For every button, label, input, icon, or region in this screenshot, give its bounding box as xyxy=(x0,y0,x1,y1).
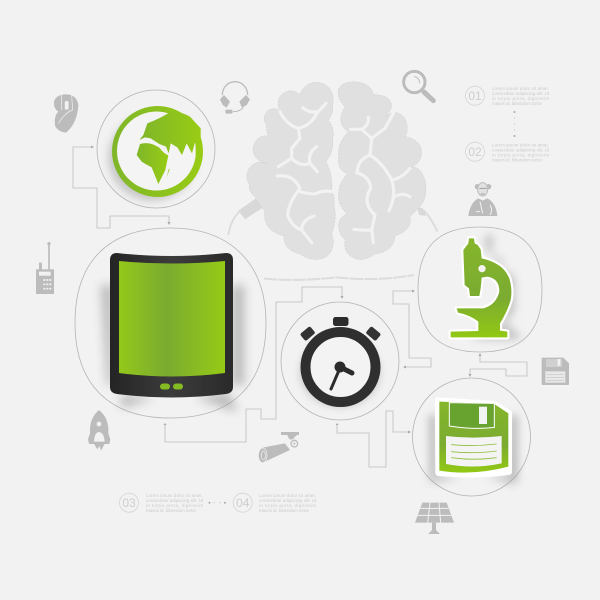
panel: floppy disk xyxy=(412,378,530,496)
globe ring xyxy=(112,106,203,197)
outline circle xyxy=(412,378,530,496)
text block 02: 02 xyxy=(468,145,482,159)
panel: microscope xyxy=(418,227,542,352)
microscope lens dot xyxy=(478,265,486,272)
icon: security camera xyxy=(258,432,299,463)
icon: rocket xyxy=(88,410,110,451)
text block 03: 03 xyxy=(122,496,136,510)
panel: globe xyxy=(97,90,215,208)
icon: computer mouse xyxy=(54,94,78,133)
brain folds xyxy=(277,103,410,243)
icon: magnifier xyxy=(404,71,433,101)
icon: doctor xyxy=(468,183,497,216)
brain lower wavy cable xyxy=(264,275,414,280)
outline circle xyxy=(281,302,399,420)
panel: stopwatch xyxy=(281,302,399,420)
text block 04: mauris id, bibendum tortor xyxy=(259,508,310,513)
text block 03: in turpis porta, dignissim xyxy=(146,503,203,508)
floppy label top xyxy=(449,403,494,428)
text block 02: mauris id, bibendum tortor xyxy=(492,158,543,162)
floppy green body xyxy=(439,402,508,473)
floppy label bottom xyxy=(446,436,502,467)
text block 01: in turpis porta, dignissim xyxy=(492,96,549,101)
floppy shadow xyxy=(429,415,517,485)
tablet buttons xyxy=(160,384,183,390)
text block 04: Lorem ipsum dolor sit amet, xyxy=(259,493,316,498)
floppy white base xyxy=(435,397,512,477)
text block 01: consectetur adipiscing elit. Ut xyxy=(492,91,550,96)
watch hands xyxy=(331,362,352,389)
text block 02 xyxy=(466,142,550,162)
text block 02: in turpis porta, dignissim xyxy=(492,152,549,158)
text block 01 xyxy=(466,86,550,106)
watch ring xyxy=(306,332,376,402)
dotted link 01 to 02 xyxy=(514,111,516,137)
text block 04: consectetur adipiscing elit. Ut xyxy=(259,498,317,503)
connector: globe to tablet xyxy=(73,146,170,228)
microscope silhouette xyxy=(451,238,511,337)
brain left hemisphere xyxy=(247,82,335,259)
watch shadow xyxy=(300,337,380,407)
microscope shadow xyxy=(470,235,522,340)
floppy slot xyxy=(479,407,487,424)
floppy sticker xyxy=(429,397,517,485)
icon: small floppy xyxy=(542,358,569,385)
text block 04 xyxy=(233,493,317,513)
connector: microscope to floppy xyxy=(468,353,527,377)
connector: tablet to stopwatch xyxy=(164,287,344,442)
brain right hemisphere xyxy=(338,82,426,259)
tablet screen xyxy=(119,261,225,376)
globe shadow xyxy=(108,115,196,201)
icon: solar panel xyxy=(415,503,454,534)
panel: tablet xyxy=(75,228,266,418)
brain illustration xyxy=(228,82,437,280)
outline shape xyxy=(75,228,266,418)
microscope sticker xyxy=(451,235,522,340)
outline shape xyxy=(418,227,542,352)
floppy label lines xyxy=(451,444,497,459)
icon: headset xyxy=(220,82,250,114)
tablet body xyxy=(110,253,233,398)
brain left cable xyxy=(228,197,267,235)
watch top button xyxy=(333,317,348,326)
text block 03: consectetur adipiscing elit. Ut xyxy=(146,498,204,503)
watch side buttons xyxy=(300,326,381,341)
text block 04: in turpis porta, dignissim xyxy=(259,503,316,508)
connector: microscope to stopwatch xyxy=(393,290,431,368)
icon: walkie talkie xyxy=(36,242,54,294)
text block 01: Lorem ipsum dolor sit amet, xyxy=(492,86,549,91)
text block 03 xyxy=(120,493,204,513)
dotted link 03 to 04 xyxy=(208,502,226,504)
continents xyxy=(137,112,201,184)
text block 01: mauris id, bibendum tortor xyxy=(492,101,543,106)
text block 02: consectetur adipiscing elit. Ut xyxy=(492,148,550,152)
tablet shadows xyxy=(101,285,244,412)
text block 01: 01 xyxy=(468,89,482,103)
text block 04: 04 xyxy=(236,496,250,510)
brain right cable xyxy=(417,207,437,232)
text block 03: Lorem ipsum dolor sit amet, xyxy=(146,493,203,498)
outline circle xyxy=(97,90,215,208)
connector: stopwatch to floppy xyxy=(336,411,411,467)
text block 03: mauris id, bibendum tortor xyxy=(146,508,197,513)
text block 02: Lorem ipsum dolor sit amet, xyxy=(492,142,549,148)
